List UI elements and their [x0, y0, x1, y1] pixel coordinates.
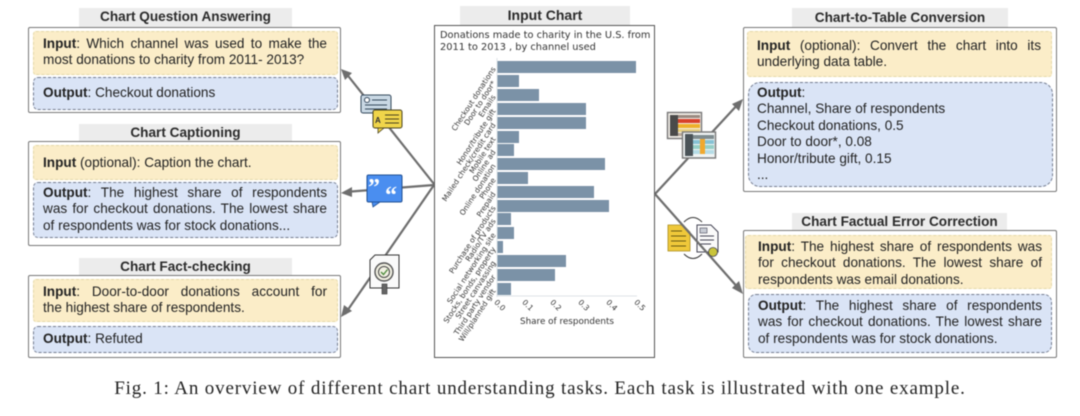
panel: input chart — [433, 6, 656, 359]
panel: chart-to-table conversion — [742, 8, 1058, 193]
output text — [748, 82, 1053, 187]
input text — [33, 279, 338, 322]
box: question answering content — [28, 27, 341, 113]
heading: chart question answering: Chart Question Answering — [100, 9, 271, 24]
bar chart: Share of respondents — [520, 317, 614, 327]
bar chart: Door to door* — [462, 79, 498, 127]
bar chart: Emails — [477, 93, 498, 119]
input text — [33, 145, 338, 180]
panel: chart factual error correction — [742, 213, 1058, 359]
icon: captioning quote bubble: “ — [385, 183, 397, 209]
output text — [33, 182, 338, 238]
bar chart: 0.1 — [520, 298, 535, 313]
bar chart: Social networking site — [445, 231, 498, 305]
bar chart: 0.3 — [576, 298, 591, 313]
output text: Channel, Share of respondents — [757, 101, 945, 116]
input text: underlying data table. — [757, 54, 887, 69]
bar chart: 0.2 — [548, 298, 563, 313]
heading: chart fact-checking: Chart Fact-checking — [120, 259, 251, 274]
input text: Input: Which channel was used to make the — [43, 36, 327, 51]
output text: ... — [757, 167, 768, 182]
bar chart: Checkout donations — [450, 65, 498, 133]
output text: Door to door*, 0.08 — [757, 134, 872, 149]
icon: captioning quote bubble: ” — [368, 175, 380, 201]
input text: Input (optional): Convert the chart into its — [757, 38, 1041, 53]
heading: chart-to-table conversion — [792, 8, 1008, 27]
chart frame — [434, 25, 655, 358]
output text — [33, 326, 338, 353]
output text — [33, 77, 338, 110]
heading: chart factual error correction: Chart Factual Error Correction — [801, 214, 998, 229]
input text — [33, 31, 338, 75]
heading: chart question answering — [79, 8, 292, 27]
bar chart: Prepaid — [475, 190, 498, 219]
output text: was for checkout donations. The lowest share — [758, 314, 1042, 329]
output text: Output: The highest share of respondents — [758, 298, 1042, 313]
output text — [748, 294, 1052, 353]
bar chart: 0.4 — [604, 298, 619, 313]
bar chart: Honor/tribute gift — [455, 107, 498, 167]
input text: respondents was email donations. — [758, 272, 964, 287]
bar chart: Stocks, bonds, property — [442, 245, 498, 325]
heading: input chart — [460, 6, 630, 25]
box: fact-checking content — [28, 275, 341, 358]
input text: for checkout donations. The lowest share of — [758, 255, 1042, 270]
bar chart: 0.5 — [632, 298, 647, 313]
input text: Input (optional): Caption the chart. — [43, 155, 252, 170]
bar chart: Phone — [477, 176, 498, 201]
output text: of respondents was for stock donations. — [758, 331, 998, 346]
icon: question answering speech bubbles: A — [375, 116, 381, 125]
bar chart: Radio/TV ads — [463, 217, 498, 263]
output text: of respondents was for stock donations... — [43, 218, 290, 233]
bar chart: Street canvassing — [454, 259, 498, 320]
chart title: Donations made to charity in the U.S. from — [440, 30, 650, 41]
heading: chart captioning: Chart Captioning — [130, 125, 241, 140]
box: table conversion content — [743, 27, 1057, 192]
bar chart: Purchase of products — [447, 204, 498, 275]
heading: chart-to-table conversion: Chart-to-Table Conversion — [815, 10, 985, 25]
bar chart: 0.0 — [492, 298, 507, 313]
figure caption: Fig. 1: An overview of different chart understanding tasks. Each task is illustrated with one example. — [114, 378, 966, 399]
bar chart: Online donation — [458, 162, 498, 217]
panel: chart question answering — [27, 8, 342, 114]
input text: most donations to charity from 2011- 2013? — [43, 52, 304, 67]
heading: input chart: Input Chart — [508, 7, 582, 23]
output text: Honor/tribute gift, 0.15 — [757, 151, 892, 166]
input text — [747, 31, 1052, 77]
bar chart: Mobile text — [467, 135, 498, 175]
output text: Output: The highest share of respondents — [43, 185, 327, 200]
output text: Checkout donations, 0.5 — [757, 118, 904, 133]
bar chart: Will/planned gift — [457, 287, 498, 343]
output text: Output: Checkout donations — [43, 85, 215, 100]
bar chart: Mailed check/credit card — [440, 121, 498, 203]
input text: Input: The highest share of respondents was — [758, 239, 1042, 254]
heading: chart fact-checking — [79, 258, 292, 275]
panel: chart fact-checking — [27, 258, 342, 359]
input text — [745, 235, 1052, 289]
heading: chart captioning — [79, 124, 292, 141]
chart title: 2011 to 2013 , by channel used — [440, 42, 596, 52]
output text: was for checkout donations. The lowest share — [43, 201, 327, 216]
output text: Output: — [757, 85, 805, 100]
panel: chart captioning — [27, 124, 342, 247]
input text: the highest share of respondents. — [43, 300, 245, 315]
box: captioning content — [28, 141, 341, 246]
output text: Output: Refuted — [43, 331, 143, 346]
chart title — [440, 30, 650, 53]
bar chart: Third party vendor — [451, 272, 498, 338]
input text: Input: Door-to-door donations account for — [43, 284, 327, 299]
bar chart: Online ad — [471, 148, 498, 183]
box: error correction content — [743, 230, 1057, 358]
